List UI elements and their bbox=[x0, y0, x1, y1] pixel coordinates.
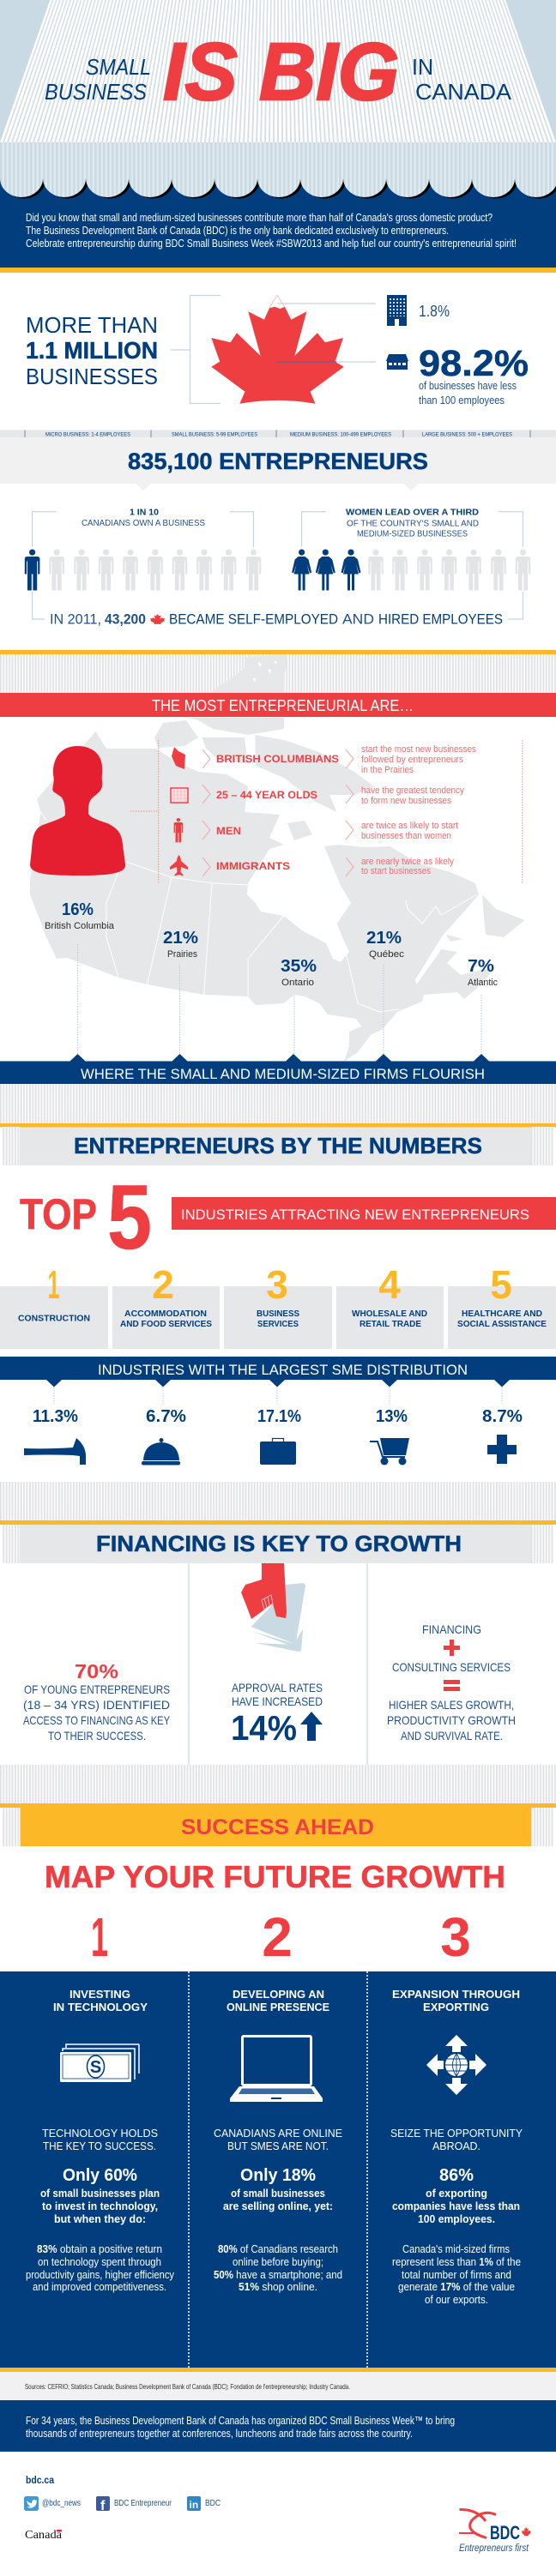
column: developing an online presence: online before buying; bbox=[233, 2255, 323, 2268]
about BDC small business week: thousands of entrepreneurs together at conferences, luncheons and trade fairs across the country. bbox=[26, 2427, 413, 2440]
column: investing in technology: of small businesses plan bbox=[40, 2187, 160, 2200]
icon: briefcase bbox=[260, 1439, 296, 1465]
map stat: Quebec: Québec bbox=[369, 949, 405, 960]
card: accommodation and food services bbox=[112, 1262, 220, 1349]
step numbers: 2 bbox=[262, 1906, 293, 1968]
BDC logo: Entrepreneurs first bbox=[459, 2542, 529, 2554]
heading: financing is key to growth: FINANCING IS KEY TO GROWTH bbox=[96, 1531, 462, 1556]
heading: financing is key to growth bbox=[20, 1525, 531, 1563]
card: construction bbox=[0, 1262, 108, 1349]
stat: 98.2%: of businesses have less bbox=[419, 380, 517, 392]
column: expansion through exporting: represent less than 1% of the bbox=[392, 2255, 521, 2268]
row: immigrants bbox=[170, 855, 454, 876]
icon: up arrow bbox=[300, 1712, 323, 1741]
row: 25-44 year olds bbox=[171, 785, 464, 806]
map stat: Atlantic: Atlantic bbox=[468, 978, 498, 988]
card: accommodation and food services: ACCOMMODATION bbox=[124, 1309, 207, 1319]
column: investing in technology: Only 60% bbox=[63, 2166, 137, 2185]
column: developing an online presence: are selling online, yet: bbox=[223, 2200, 333, 2212]
business size legend bar: MICRO BUSINESS: 1-4 EMPLOYEES bbox=[45, 432, 131, 437]
social: facebook: BDC Entrepreneur bbox=[114, 2499, 172, 2508]
column: expansion through exporting: companies have less than bbox=[392, 2200, 520, 2212]
column: developing an online presence: DEVELOPING AN bbox=[233, 1988, 324, 2001]
callout: self-employed in 2011: AND bbox=[342, 611, 374, 628]
column: investing in technology: 83% obtain a positive return bbox=[37, 2242, 162, 2255]
column: expansion through exporting: SEIZE THE OPPORTUNITY bbox=[390, 2127, 523, 2140]
heading: map your future growth: MAP YOUR FUTURE GROWTH bbox=[45, 1859, 505, 1894]
column: developing an online presence: CANADIANS ARE ONLINE bbox=[214, 2127, 342, 2140]
business size legend bar bbox=[0, 430, 556, 437]
row: immigrants: are nearly twice as likely bbox=[361, 857, 454, 867]
icon: plus bbox=[444, 1640, 460, 1656]
column: developing an online presence: ONLINE PRESENCE bbox=[227, 2001, 329, 2013]
stat: food services 6.7% bbox=[142, 1407, 186, 1465]
heading: success ahead: SUCCESS AHEAD bbox=[181, 1815, 374, 1839]
heading: top 5: TOP bbox=[20, 1190, 97, 1238]
callout: self-employed in 2011: HIRED EMPLOYEES bbox=[378, 611, 503, 628]
intro text bbox=[26, 212, 517, 250]
stat: construction 11.3%: 11.3% bbox=[33, 1407, 78, 1426]
text block: 70% of young entrepreneurs: OF YOUNG ENTREPRENEURS bbox=[24, 1682, 170, 1696]
awning roof with radiating stripes bbox=[0, 0, 556, 142]
map stat: Ontario: Ontario bbox=[281, 978, 314, 988]
icon: person silhouette bbox=[30, 746, 125, 876]
chart: maple leaf proportion bbox=[211, 295, 376, 404]
map stat: British Columbia bbox=[45, 900, 115, 1055]
column: expansion through exporting: 86% bbox=[439, 2166, 474, 2185]
row: 25-44 year olds: have the greatest tendency bbox=[361, 785, 464, 796]
column: developing an online presence: BUT SMES ARE NOT. bbox=[227, 2140, 329, 2152]
icon: hammer bbox=[24, 1438, 86, 1465]
row: men: businesses than women bbox=[361, 831, 451, 841]
row: 25-44 year olds: to form new businesses bbox=[361, 796, 451, 806]
row: British Columbians bbox=[172, 744, 476, 775]
sources bbox=[0, 2372, 556, 2400]
awning header bbox=[0, 142, 556, 268]
card: healthcare and social assistance: HEALTHCARE AND bbox=[462, 1309, 542, 1319]
heading: entrepreneurs by the numbers: ENTREPRENEURS BY THE NUMBERS bbox=[74, 1133, 482, 1159]
text block: approval rates: HAVE INCREASED bbox=[232, 1694, 323, 1708]
banner: where firms flourish bbox=[0, 1054, 556, 1084]
banner: industries with largest SME distribution bbox=[0, 1357, 556, 1404]
heading: success ahead bbox=[21, 1808, 531, 1846]
map stat: Prairies: 21% bbox=[163, 929, 198, 948]
text block: financing plus consulting: HIGHER SALES GROWTH, bbox=[389, 1698, 514, 1712]
social: linkedin: in bbox=[189, 2499, 198, 2511]
step numbers: 1 bbox=[91, 1906, 108, 1968]
map stat: British Columbia: 16% bbox=[62, 900, 94, 919]
banner: industries attracting new entrepreneurs: INDUSTRIES ATTRACTING NEW ENTREPRENEURS bbox=[181, 1207, 529, 1223]
column: developing an online presence bbox=[214, 1988, 342, 2293]
row: British Columbians: BRITISH COLUMBIANS bbox=[216, 753, 339, 765]
callout: self-employed in 2011 bbox=[33, 592, 523, 628]
column: developing an online presence: 50% have a smartphone; and bbox=[214, 2268, 342, 2281]
column: investing in technology: IN TECHNOLOGY bbox=[53, 2001, 148, 2013]
stat: business services 17.1% bbox=[257, 1407, 301, 1465]
card: accommodation and food services: 2 bbox=[152, 1262, 174, 1307]
icon: calendar bbox=[171, 788, 188, 803]
callout: self-employed in 2011: BECAME SELF-EMPLOYED bbox=[169, 611, 338, 628]
column: expansion through exporting: 100 employees. bbox=[418, 2212, 495, 2225]
row: men: are twice as likely to start bbox=[361, 821, 458, 831]
icon: medical cross bbox=[487, 1435, 517, 1464]
business size legend bar: SMALL BUSINESS: 5-99 EMPLOYEES bbox=[172, 432, 258, 437]
title: CANADA bbox=[415, 79, 512, 105]
text block: 70% of young entrepreneurs: ACCESS TO FINANCING AS KEY bbox=[23, 1713, 171, 1727]
BDC logo bbox=[459, 2509, 531, 2554]
heading: more than 1.1 million businesses: BUSINESSES bbox=[26, 364, 158, 389]
navy band behind scallops bbox=[0, 172, 556, 268]
social: linkedin bbox=[187, 2496, 221, 2511]
banner: the most entrepreneurial are: THE MOST ENTREPRENEURIAL ARE… bbox=[152, 697, 414, 714]
column: developing an online presence: 80% of Canadians research bbox=[218, 2242, 338, 2255]
step numbers: 3 bbox=[440, 1906, 471, 1968]
social: facebook bbox=[96, 2496, 172, 2513]
scalloped valance bbox=[0, 142, 556, 197]
card: wholesale and retail trade bbox=[336, 1262, 444, 1349]
callout: 1 in 10 canadians bbox=[33, 509, 253, 547]
callout: women lead over a third: MEDIUM-SIZED BUSINESSES bbox=[357, 530, 468, 539]
heading: top 5 bbox=[20, 1165, 152, 1268]
map of Canada bbox=[30, 654, 525, 1062]
card: construction: 1 bbox=[48, 1262, 60, 1307]
row: immigrants: IMMIGRANTS bbox=[216, 860, 290, 872]
card: business services: BUSINESS bbox=[257, 1309, 299, 1319]
column: developing an online presence: Only 18% bbox=[240, 2166, 316, 2185]
stat: retail 13%: 13% bbox=[376, 1407, 408, 1426]
card: wholesale and retail trade: 4 bbox=[378, 1262, 401, 1307]
dotted bracket bbox=[130, 740, 523, 883]
column: expansion through exporting: ABROAD. bbox=[432, 2140, 480, 2152]
stat: 98.2% bbox=[419, 343, 529, 406]
column: investing in technology: on technology spent through bbox=[38, 2255, 161, 2268]
text block: financing plus consulting bbox=[387, 1622, 516, 1742]
column: investing in technology bbox=[26, 1988, 174, 2293]
heading: more than 1.1 million businesses: MORE THAN bbox=[26, 312, 158, 338]
panel: growth steps bbox=[0, 1971, 556, 2368]
icon: hand with documents bbox=[241, 1563, 306, 1652]
text block: 70% of young entrepreneurs bbox=[23, 1660, 171, 1742]
card: wholesale and retail trade: RETAIL TRADE bbox=[360, 1320, 421, 1329]
column: investing in technology: to invest in technology, bbox=[42, 2200, 158, 2212]
column: investing in technology: and improved competitiveness. bbox=[33, 2280, 166, 2293]
text block: approval rates bbox=[231, 1681, 323, 1748]
BDC logo: BDC bbox=[490, 2522, 520, 2543]
text block: 70% of young entrepreneurs: (18 – 34 YRS) IDENTIFIED bbox=[23, 1698, 170, 1712]
card: business services: SERVICES bbox=[257, 1320, 299, 1329]
callout: self-employed in 2011: IN 2011, bbox=[50, 611, 101, 628]
card: construction: CONSTRUCTION bbox=[18, 1315, 90, 1324]
intro text: The Business Development Bank of Canada (BDC) is the only bank dedicated exclusively to entrepreneurs. bbox=[26, 225, 449, 237]
awning sky background bbox=[0, 0, 556, 144]
column: expansion through exporting bbox=[390, 1988, 523, 2306]
column: investing in technology: TECHNOLOGY HOLDS bbox=[42, 2127, 158, 2140]
social: twitter: @bdc_news bbox=[42, 2499, 81, 2508]
map stat: British Columbia: British Columbia bbox=[45, 921, 115, 931]
card: wholesale and retail trade: WHOLESALE AND bbox=[352, 1309, 427, 1319]
map stat: Prairies: Prairies bbox=[167, 949, 197, 960]
website link: bdc.ca bbox=[26, 2474, 54, 2486]
stat: business services 17.1%: 17.1% bbox=[257, 1407, 301, 1426]
Canada wordmark: Canada bbox=[25, 2529, 63, 2542]
icon: money stack: S bbox=[90, 2058, 101, 2077]
icon: airplane bbox=[170, 855, 188, 876]
card: healthcare and social assistance: SOCIAL ASSISTANCE bbox=[457, 1320, 547, 1329]
column: investing in technology: THE KEY TO SUCCESS. bbox=[43, 2140, 156, 2152]
banner: the most entrepreneurial are bbox=[0, 693, 556, 717]
business size legend bar: LARGE BUSINESS: 500 + EMPLOYEES bbox=[422, 432, 513, 437]
text block: approval rates: APPROVAL RATES bbox=[232, 1681, 323, 1694]
icon: equals bbox=[444, 1680, 460, 1691]
row: British Columbians: followed by entrepreneurs bbox=[361, 755, 463, 765]
column: expansion through exporting: EXPANSION THROUGH bbox=[392, 1988, 520, 2001]
row: immigrants: to start businesses bbox=[361, 866, 431, 876]
sources: Sources: CEFRIO; Statistics Canada; Business Development Bank of Canada (BDC); Fondation de l'entrepreneurship; Industry Canada. bbox=[25, 2382, 350, 2391]
panel: 835,100 entrepreneurs: 835,100 ENTREPRENEURS bbox=[128, 448, 428, 474]
column: investing in technology: INVESTING bbox=[70, 1988, 130, 2001]
column: expansion through exporting: Canada's mid-sized firms bbox=[402, 2242, 510, 2255]
stat: 98.2%: 98.2% bbox=[419, 343, 529, 384]
column: expansion through exporting: of our exports. bbox=[425, 2293, 488, 2306]
column: developing an online presence: 51% shop online. bbox=[239, 2280, 317, 2293]
stat: 1.8%: 1.8% bbox=[419, 303, 450, 320]
column: expansion through exporting: generate 17% of the value bbox=[398, 2280, 515, 2293]
bracket bbox=[171, 295, 221, 403]
card: business services: 3 bbox=[266, 1262, 288, 1307]
icon: service bell bbox=[142, 1438, 180, 1465]
text block: financing plus consulting: AND SURVIVAL RATE. bbox=[401, 1729, 503, 1742]
title: IN bbox=[412, 54, 433, 80]
about BDC small business week bbox=[0, 2400, 556, 2452]
banner: industries with largest SME distribution: INDUSTRIES WITH THE LARGEST SME DISTRIBUTION bbox=[98, 1362, 468, 1378]
pictogram: women leaders bbox=[292, 549, 530, 590]
stat: construction 11.3% bbox=[24, 1407, 86, 1465]
column: expansion through exporting: total number of firms and bbox=[402, 2268, 511, 2281]
stat: food services 6.7%: 6.7% bbox=[146, 1407, 186, 1426]
text block: approval rates: 14% bbox=[231, 1708, 297, 1748]
map stat: Quebec bbox=[366, 929, 405, 1055]
column: developing an online presence: of small businesses bbox=[231, 2187, 325, 2200]
column: expansion through exporting: of exporting bbox=[426, 2187, 487, 2200]
stat: 98.2%: than 100 employees bbox=[419, 394, 505, 406]
step numbers bbox=[91, 1906, 471, 1968]
column: investing in technology: productivity gains, higher efficiency bbox=[26, 2268, 174, 2281]
stat: healthcare 8.7%: 8.7% bbox=[482, 1407, 523, 1426]
card: healthcare and social assistance bbox=[448, 1262, 556, 1349]
social: linkedin: BDC bbox=[205, 2499, 221, 2508]
heading: more than 1.1 million businesses: 1.1 MILLION bbox=[26, 337, 158, 364]
title: SMALL bbox=[86, 54, 151, 80]
icon: globe with arrows bbox=[426, 2035, 486, 2095]
icon: office tower bbox=[387, 295, 407, 326]
row: British Columbians: in the Prairies bbox=[361, 765, 414, 775]
icon: money stack bbox=[60, 2044, 139, 2082]
callout: women lead over a third bbox=[302, 509, 523, 547]
row: British Columbians: start the most new businesses bbox=[361, 744, 476, 755]
card: business services bbox=[224, 1262, 332, 1349]
map stat: Prairies bbox=[163, 929, 198, 1055]
business size legend bar: MEDIUM BUSINESS: 100-499 EMPLOYEES bbox=[290, 432, 392, 437]
panel: 835,100 entrepreneurs bbox=[0, 437, 556, 491]
map stat: Atlantic bbox=[468, 957, 498, 1055]
callout: women lead over a third: WOMEN LEAD OVER A THIRD bbox=[346, 509, 479, 518]
row: men bbox=[174, 818, 458, 842]
text block: financing plus consulting: PRODUCTIVITY GROWTH bbox=[387, 1713, 516, 1727]
callout: women lead over a third: OF THE COUNTRY'S SMALL AND bbox=[347, 520, 479, 528]
row: 25-44 year olds: 25 – 44 YEAR OLDS bbox=[216, 789, 317, 801]
title bbox=[45, 27, 512, 117]
heading: more than 1.1 million businesses bbox=[26, 312, 158, 389]
row: men: MEN bbox=[216, 825, 241, 837]
callout: self-employed in 2011: 43,200 bbox=[105, 611, 146, 628]
icon: BC province bbox=[172, 747, 185, 769]
callout: 1 in 10 canadians: 1 IN 10 bbox=[130, 509, 159, 518]
about BDC small business week: For 34 years, the Business Development Bank of Canada has organized BDC Small Business Week™ to bring bbox=[26, 2414, 455, 2427]
icon: small store bbox=[386, 354, 408, 370]
card: healthcare and social assistance: 5 bbox=[490, 1262, 512, 1307]
social: twitter bbox=[24, 2496, 81, 2511]
text block: financing plus consulting: FINANCING bbox=[422, 1622, 481, 1636]
map stat: Quebec: 21% bbox=[366, 929, 402, 948]
text block: financing plus consulting: CONSULTING SERVICES bbox=[392, 1660, 511, 1674]
card: accommodation and food services: AND FOOD SERVICES bbox=[120, 1320, 212, 1329]
scallop shadow bbox=[0, 144, 556, 199]
column: investing in technology: but when they do: bbox=[54, 2212, 146, 2225]
stat: healthcare 8.7% bbox=[482, 1407, 523, 1464]
icon: man bbox=[174, 818, 183, 842]
text block: 70% of young entrepreneurs: TO THEIR SUCCESS. bbox=[48, 1729, 146, 1742]
banner: where firms flourish: WHERE THE SMALL AND MEDIUM-SIZED FIRMS FLOURISH bbox=[81, 1066, 485, 1082]
map stat: Ontario bbox=[281, 957, 317, 1055]
heading: top 5: 5 bbox=[107, 1165, 152, 1268]
map stat: Atlantic: 7% bbox=[468, 957, 494, 976]
title: BUSINESS bbox=[45, 79, 148, 105]
column: expansion through exporting: EXPORTING bbox=[423, 2001, 489, 2013]
banner: industries attracting new entrepreneurs bbox=[172, 1197, 556, 1230]
title: IS BIG bbox=[163, 27, 399, 117]
social: facebook: f bbox=[100, 2499, 106, 2513]
map stat: Ontario: 35% bbox=[281, 957, 317, 976]
heading: entrepreneurs by the numbers bbox=[20, 1127, 531, 1165]
stat: retail 13% bbox=[370, 1407, 409, 1465]
callout: 1 in 10 canadians: CANADIANS OWN A BUSINESS bbox=[82, 519, 205, 528]
text block: 70% of young entrepreneurs: 70% bbox=[75, 1660, 118, 1682]
icon: laptop bbox=[230, 2036, 323, 2102]
pictogram: 1 in 10 people bbox=[25, 549, 261, 590]
icon: shopping cart bbox=[370, 1438, 409, 1465]
